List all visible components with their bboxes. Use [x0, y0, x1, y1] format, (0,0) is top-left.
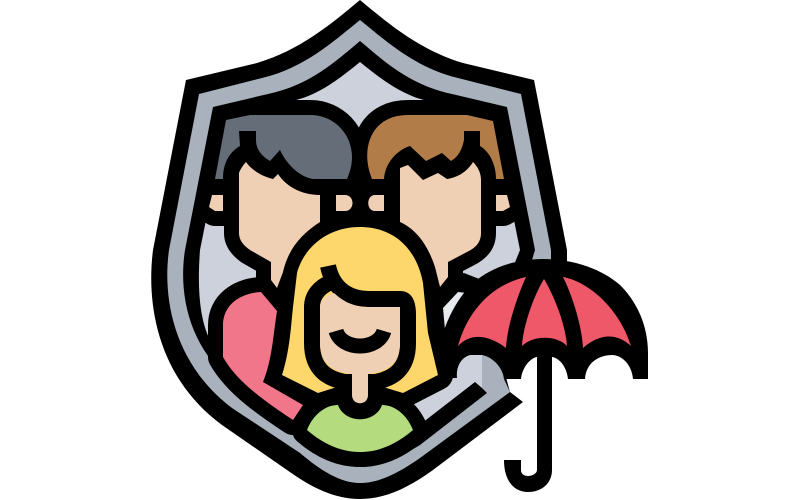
woman	[282, 227, 438, 452]
right man's face	[400, 162, 481, 287]
umbrella right red panel	[563, 277, 631, 348]
left man	[209, 115, 352, 420]
woman's face and neck	[320, 293, 400, 403]
umbrella black silhouette	[439, 259, 648, 492]
woman's green shirt	[307, 405, 413, 452]
right man's hair	[367, 115, 504, 179]
left man's left ear	[209, 195, 223, 211]
woman's yellow hair	[282, 227, 438, 393]
umbrella middle red panel	[522, 279, 567, 346]
woman's smile	[336, 331, 384, 346]
black backing of the people	[209, 115, 510, 452]
shield	[151, 0, 567, 499]
shield outer outline	[151, 0, 567, 499]
woman's face outline	[312, 266, 408, 382]
right man's right ear	[496, 195, 510, 211]
woman's neck outline	[337, 375, 383, 412]
shield grey band	[167, 20, 551, 483]
man's shirt highlight	[443, 292, 467, 330]
umbrella left red panel	[458, 277, 526, 348]
left man's face	[239, 162, 320, 288]
right man	[367, 115, 510, 287]
right man's left ear	[368, 195, 384, 211]
left man's right ear	[336, 195, 352, 211]
right man's shoulder outline	[435, 267, 500, 345]
shield light inner field	[199, 62, 520, 452]
left man's pink shirt	[223, 292, 303, 420]
umbrella	[439, 259, 648, 492]
left man's hair	[215, 115, 352, 179]
shield inner outline	[183, 41, 535, 467]
